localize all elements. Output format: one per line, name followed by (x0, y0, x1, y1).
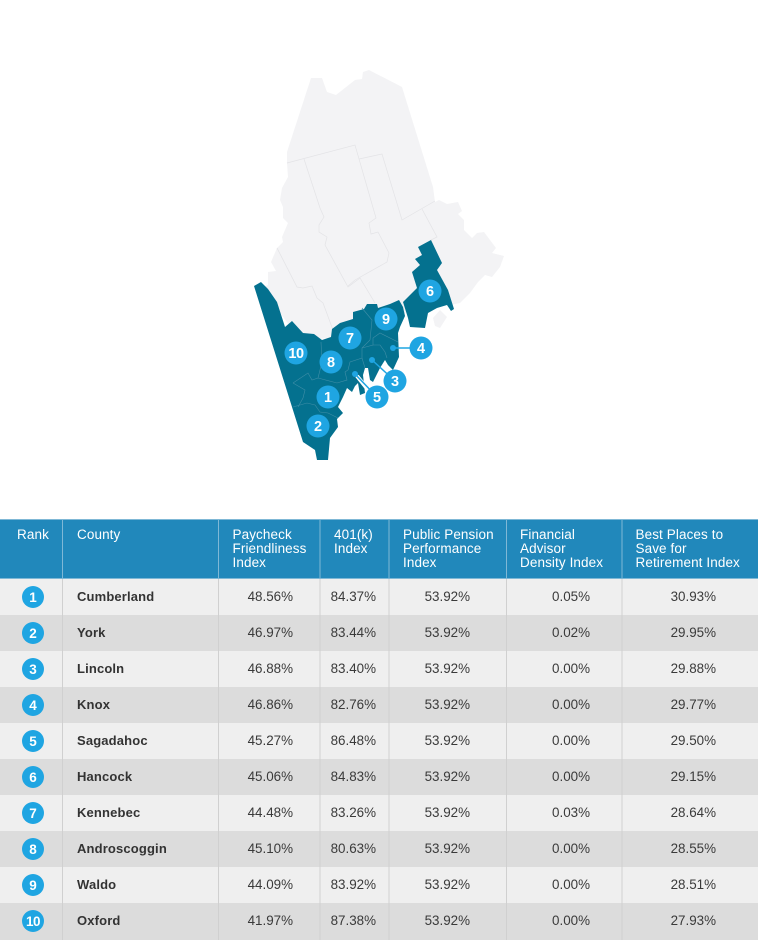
table header: Performance (403, 541, 481, 556)
rank badges: 4 (29, 698, 37, 713)
table header: Financial (520, 527, 575, 542)
table header: Rank (17, 527, 49, 542)
map rank markers: 10 (288, 346, 304, 362)
column: best places to save: 28.55% (671, 841, 716, 856)
column: 401(k): 87.38% (331, 913, 376, 928)
column: best places to save: 29.15% (671, 769, 716, 784)
column: paycheck friendliness: 45.27% (248, 733, 293, 748)
marker anchor dots (352, 345, 396, 377)
table header: Density Index (520, 555, 603, 570)
table header: County (77, 527, 121, 542)
column: 401(k): 84.83% (331, 769, 376, 784)
column: public pension (425, 589, 470, 928)
column: paycheck friendliness: 45.10% (248, 841, 293, 856)
county names: Oxford (77, 913, 121, 928)
county names: York (77, 625, 106, 640)
marker leader lines (355, 348, 421, 397)
column: 401(k): 82.76% (331, 697, 376, 712)
table header: Index (232, 555, 266, 570)
rank badges: 2 (29, 626, 37, 641)
rank badges: 8 (29, 842, 37, 857)
column: paycheck friendliness: 46.97% (248, 625, 293, 640)
table row backgrounds (0, 579, 758, 940)
county names: Hancock (77, 769, 133, 784)
county names: Kennebec (77, 805, 140, 820)
column: paycheck friendliness: 41.97% (248, 913, 293, 928)
column: 401(k): 83.40% (331, 661, 376, 676)
county names: Waldo (77, 877, 116, 892)
table header: Index (403, 555, 437, 570)
map rank markers: 2 (314, 419, 322, 435)
table header: Public Pension (403, 527, 494, 542)
table header: Index (334, 541, 368, 556)
map rank markers (284, 280, 442, 438)
map rank markers: 7 (346, 331, 354, 347)
column: 401(k): 84.37% (331, 589, 376, 604)
column: financial advisor density: 0.00% (552, 769, 590, 784)
rank badges: 1 (29, 590, 37, 605)
column: financial advisor density (552, 589, 590, 928)
map rank markers: 4 (417, 341, 425, 357)
table header: Advisor (520, 541, 566, 556)
column: financial advisor density: 0.00% (552, 661, 590, 676)
rank badges: 5 (29, 734, 37, 749)
column: 401(k): 83.92% (331, 877, 376, 892)
column: public pension: 53.92% (425, 769, 470, 784)
column: paycheck friendliness (248, 589, 293, 928)
column: best places to save: 28.51% (671, 877, 716, 892)
column: best places to save: 30.93% (671, 589, 716, 604)
table header: 401(k) (334, 527, 373, 542)
map rank markers: 9 (382, 312, 390, 328)
column: financial advisor density: 0.00% (552, 841, 590, 856)
column: financial advisor density: 0.03% (552, 805, 590, 820)
table header: Best Places to (636, 527, 723, 542)
map: ranked counties in teal (254, 240, 454, 460)
county names: Cumberland (77, 589, 154, 604)
column: financial advisor density: 0.00% (552, 697, 590, 712)
table header (0, 519, 758, 579)
rank badges: 10 (26, 914, 40, 929)
map: non-ranked counties (262, 70, 504, 340)
table header: Paycheck (232, 527, 292, 542)
column: financial advisor density: 0.00% (552, 877, 590, 892)
county names (77, 589, 167, 928)
column: paycheck friendliness: 48.56% (248, 589, 293, 604)
column: financial advisor density: 0.05% (552, 589, 590, 604)
column: paycheck friendliness: 44.48% (248, 805, 293, 820)
column: best places to save: 29.95% (671, 625, 716, 640)
column: public pension: 53.92% (425, 625, 470, 640)
column: best places to save: 29.88% (671, 661, 716, 676)
county names: Androscoggin (77, 841, 167, 856)
column: public pension: 53.92% (425, 661, 470, 676)
column: public pension: 53.92% (425, 805, 470, 820)
rank badges: 3 (29, 662, 37, 677)
rank badges: 7 (29, 806, 37, 821)
column: 401(k): 80.63% (331, 841, 376, 856)
column: best places to save: 29.50% (671, 733, 716, 748)
column: best places to save: 28.64% (671, 805, 716, 820)
map rank markers: 8 (327, 355, 335, 371)
column: 401(k) (331, 589, 376, 928)
column: paycheck friendliness: 46.88% (248, 661, 293, 676)
column: 401(k): 83.44% (331, 625, 376, 640)
map rank markers: 3 (391, 374, 399, 390)
column: best places to save (671, 589, 716, 928)
rank badges: 6 (29, 770, 37, 785)
rank badges (22, 586, 44, 932)
map rank markers: 6 (426, 284, 434, 300)
column: public pension: 53.92% (425, 697, 470, 712)
county names: Sagadahoc (77, 733, 148, 748)
column: financial advisor density: 0.02% (552, 625, 590, 640)
column: best places to save: 27.93% (671, 913, 716, 928)
column: financial advisor density: 0.00% (552, 733, 590, 748)
column: public pension: 53.92% (425, 877, 470, 892)
table header: Friendliness (232, 541, 307, 556)
county names: Knox (77, 697, 111, 712)
column: public pension: 53.92% (425, 913, 470, 928)
column: 401(k): 83.26% (331, 805, 376, 820)
column: 401(k): 86.48% (331, 733, 376, 748)
table header: Save for (636, 541, 687, 556)
column: paycheck friendliness: 44.09% (248, 877, 293, 892)
rank badges: 9 (29, 878, 37, 893)
map rank markers: 5 (373, 390, 381, 406)
column: public pension: 53.92% (425, 733, 470, 748)
map of Maine counties (254, 70, 504, 460)
map rank markers: 1 (324, 390, 332, 406)
column: best places to save: 29.77% (671, 697, 716, 712)
column: public pension: 53.92% (425, 841, 470, 856)
county names: Lincoln (77, 661, 124, 676)
column: paycheck friendliness: 45.06% (248, 769, 293, 784)
column: financial advisor density: 0.00% (552, 913, 590, 928)
column: paycheck friendliness: 46.86% (248, 697, 293, 712)
table header: Retirement Index (636, 555, 740, 570)
column: public pension: 53.92% (425, 589, 470, 604)
